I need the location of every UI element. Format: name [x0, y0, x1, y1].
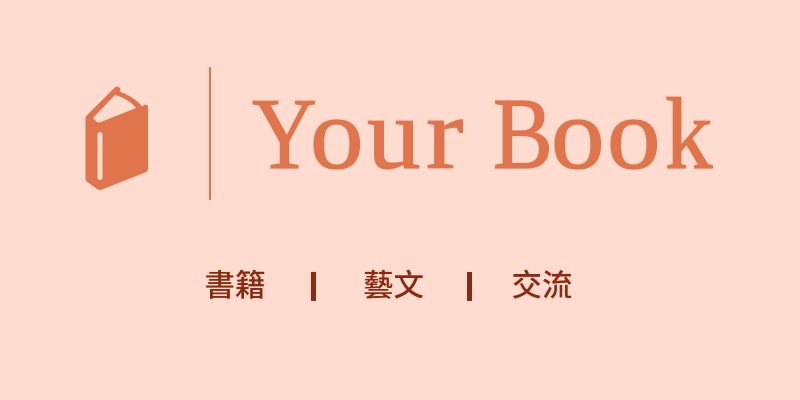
divider line	[209, 67, 211, 200]
separator bar	[311, 272, 316, 301]
title: r	[426, 78, 471, 191]
title: B	[493, 78, 544, 191]
title: k	[665, 78, 712, 191]
title	[252, 78, 713, 191]
title: o	[607, 78, 668, 191]
separator bar	[467, 272, 472, 301]
icon: book	[86, 86, 148, 190]
title: u	[367, 78, 429, 191]
text: arts: 藝文	[363, 269, 424, 303]
title: o	[551, 78, 609, 191]
title: Y	[252, 78, 303, 191]
text: books: 書籍	[204, 269, 266, 303]
title: o	[310, 78, 370, 191]
text: exchange: 交流	[512, 269, 572, 303]
